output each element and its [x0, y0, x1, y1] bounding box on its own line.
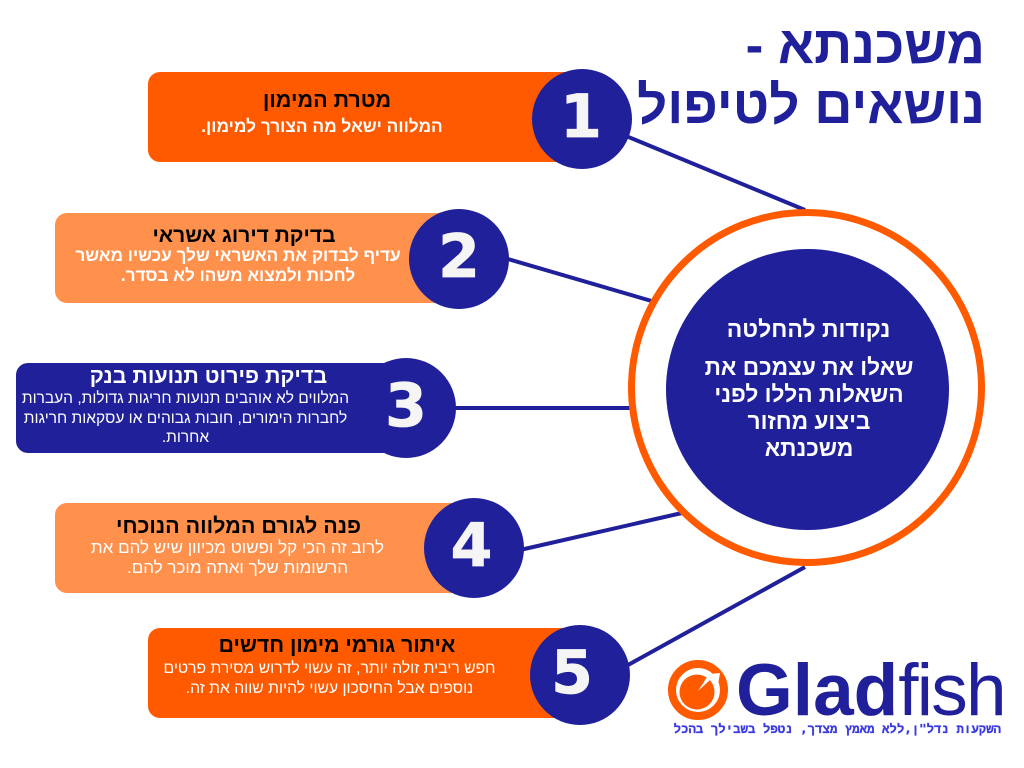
- number 2: [409, 209, 509, 309]
- panel: item 2: [55, 209, 509, 309]
- text 3: אחרות.: [162, 429, 209, 446]
- panel: item 3: [16, 358, 456, 458]
- number 2: 2: [438, 222, 480, 292]
- heading 4: פנה לגורם המלווה הנוכחי: [116, 514, 361, 538]
- panel: item 4: [55, 498, 524, 598]
- text 2: [75, 245, 401, 285]
- number 5: 5: [551, 638, 593, 708]
- number 4: 4: [451, 511, 492, 581]
- number 1: [532, 69, 632, 169]
- central heading: נקודות להחלטה: [727, 316, 890, 342]
- card 2 background: [55, 213, 455, 303]
- title: משכנתא -: [746, 16, 985, 75]
- text 3: המלווים לא אוהבים תנועות חריגות גדולות, העברות: [22, 390, 349, 407]
- central text: שאלו את עצמכם את: [705, 354, 913, 380]
- panel: item 1: [148, 69, 632, 169]
- central text: משכנתא: [765, 435, 853, 461]
- text 5: חפש ריבית זולה יותר, זה עשוי לדרוש מסירת פרטים: [164, 660, 495, 677]
- text 5: נוספים אבל החיסכון עשוי להיות שווה את זה.: [186, 680, 473, 697]
- icon: logo ring: [668, 660, 728, 720]
- text 3: [22, 390, 349, 446]
- logo wordmark: Gladfish: [736, 650, 1005, 731]
- title: [637, 16, 985, 135]
- central text: [705, 354, 913, 461]
- text 2: לחכות ולמצוא משהו לא בסדר.: [121, 265, 355, 285]
- panel: item 5: [148, 625, 630, 725]
- panel: central decision circle: [628, 209, 985, 566]
- card 5 background: [148, 628, 578, 718]
- card 3 background: [16, 363, 396, 453]
- card 4 background: [55, 503, 475, 593]
- text 5: [164, 660, 495, 697]
- text 4: לרוב זה הכי קל ופשוט מכיוון שיש להם את: [91, 538, 384, 557]
- tagline: השקעות נדל"ן,ללא מאמץ מצדך, נטפל בשבילך בהכל: [674, 721, 1001, 736]
- heading 2: בדיקת דירוג אשראי: [152, 224, 336, 247]
- text 2: עדיף לבדוק את האשראי שלך עכשיו מאשר: [75, 245, 401, 265]
- heading 5: איתור גורמי מימון חדשים: [219, 634, 455, 657]
- card 1 background: [148, 72, 578, 162]
- central text: השאלות הללו לפני: [714, 381, 904, 407]
- number 3: 3: [385, 371, 427, 441]
- heading 1: מטרת המימון: [263, 88, 391, 112]
- number 4: [424, 498, 524, 598]
- number 3: [356, 358, 456, 458]
- text 4: [91, 538, 384, 577]
- number 5: [530, 625, 630, 725]
- central text: ביצוע מחזור: [748, 408, 870, 434]
- logo: Gladfish: [668, 650, 1005, 736]
- inner navy disc: [666, 249, 949, 530]
- outer orange ring: [628, 209, 985, 566]
- number 1: 1: [560, 82, 602, 152]
- title: נושאים לטיפול: [637, 76, 985, 135]
- text 1: המלווה ישאל מה הצורך למימון.: [201, 116, 443, 136]
- heading 3: בדיקת פירוט תנועות בנק: [90, 364, 327, 388]
- text 4: הרשומות שלך ואתה מוכר להם.: [127, 558, 348, 577]
- text 3: לחברות הימורים, חובות גבוהים או עסקאות חריגות: [24, 410, 347, 426]
